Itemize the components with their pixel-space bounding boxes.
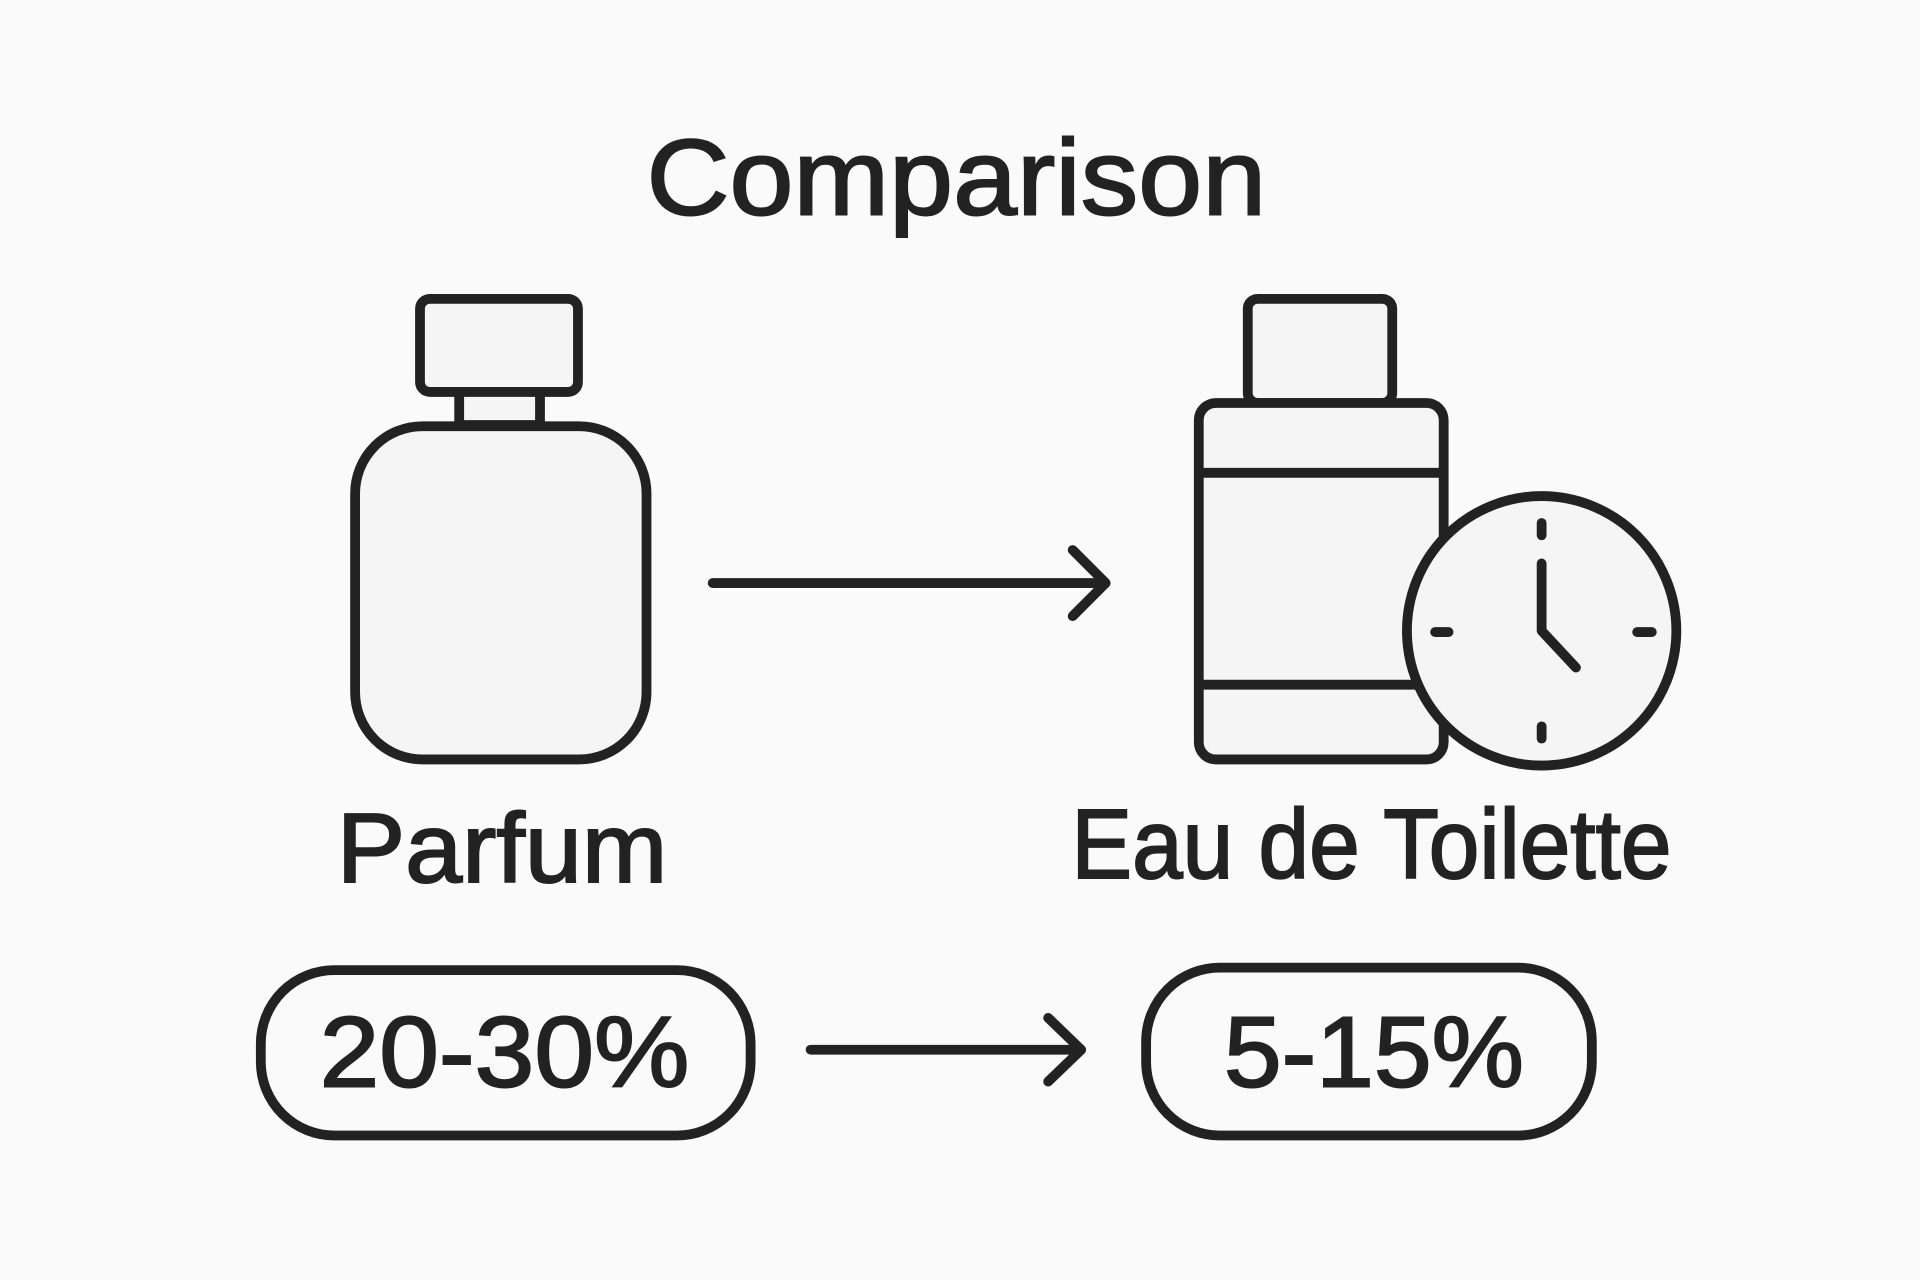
pill: 5-15%: 5-15% — [1224, 996, 1524, 1108]
label: Parfum: Parfum — [337, 793, 667, 903]
icon: parfum bottle — [355, 299, 647, 759]
pill: 20-30% — [261, 970, 751, 1135]
title: Comparison — [647, 116, 1266, 237]
icon: clock — [1407, 496, 1676, 766]
pill: 5-15% — [1146, 968, 1592, 1135]
arrow: bottom — [811, 1018, 1081, 1082]
pill: 20-30%: 20-30% — [320, 996, 689, 1108]
arrow: top — [713, 550, 1106, 616]
icon: eau de toilette bottle with clock — [1199, 299, 1676, 766]
label: Eau de Toilette: Eau de Toilette — [1071, 789, 1671, 899]
